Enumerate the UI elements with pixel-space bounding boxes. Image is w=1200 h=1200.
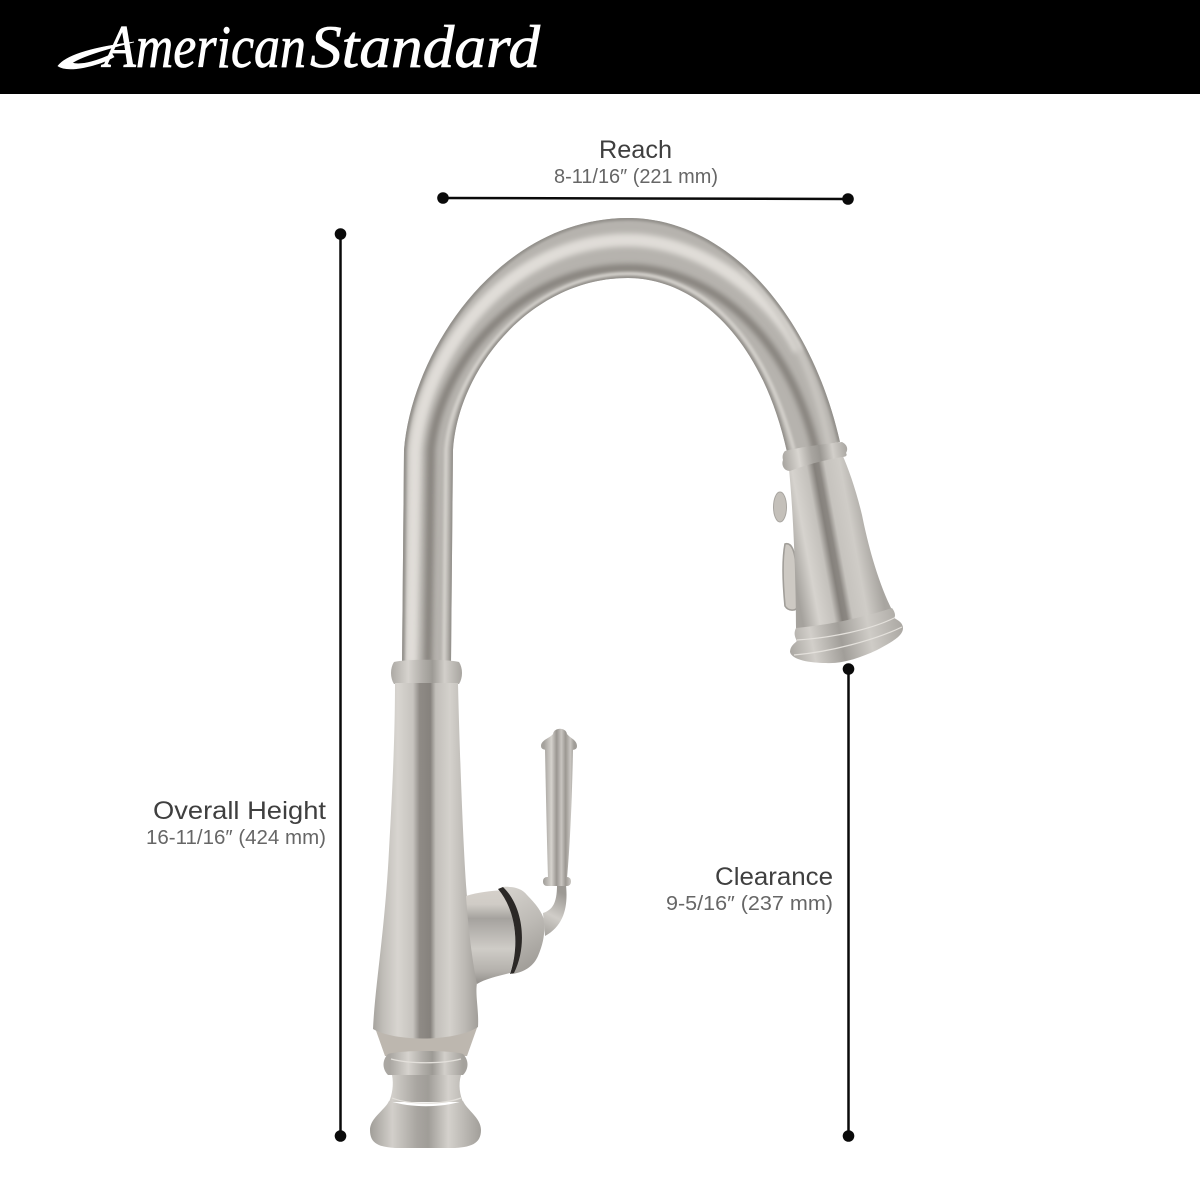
base neck <box>389 1075 463 1102</box>
dimension: overall height <box>146 228 346 1142</box>
base foot <box>370 1101 481 1148</box>
overall height label: Overall Height <box>153 797 326 825</box>
reach line <box>437 192 854 205</box>
overall height line <box>335 228 346 1142</box>
spray head <box>789 454 893 648</box>
spray head collar <box>782 442 847 471</box>
faucet illustration <box>370 210 903 1148</box>
spray button <box>774 492 786 522</box>
hub cap <box>503 887 544 974</box>
faucet body <box>373 683 478 1039</box>
body column <box>374 1025 478 1056</box>
reach value: 8-11/16″ (221 mm) <box>554 166 718 188</box>
base ring <box>384 1051 468 1075</box>
overall height value: 16-11/16″ (424 mm) <box>146 827 326 849</box>
lever cap <box>541 729 577 750</box>
logo wordmark: American Standard: Standard <box>310 14 541 80</box>
logo wordmark: American Standard <box>58 14 541 80</box>
logo wordmark: American Standard: American <box>101 14 306 80</box>
reach label: Reach <box>599 136 672 164</box>
lever shaft <box>545 749 573 878</box>
spout tube <box>395 210 845 670</box>
lever elbow <box>543 885 567 936</box>
hub gasket <box>498 887 522 974</box>
body collar <box>391 660 462 684</box>
clearance label: Clearance <box>715 863 833 891</box>
dimension: reach <box>437 136 854 205</box>
spray head base rings <box>790 608 903 663</box>
dimension: clearance <box>666 663 854 1142</box>
clearance line <box>843 663 854 1142</box>
lever collar <box>543 877 571 886</box>
clearance value: 9-5/16″ (237 mm) <box>666 893 833 915</box>
header banner with logo <box>0 0 1200 94</box>
handle hub <box>466 890 515 984</box>
spray rocker <box>783 544 798 610</box>
